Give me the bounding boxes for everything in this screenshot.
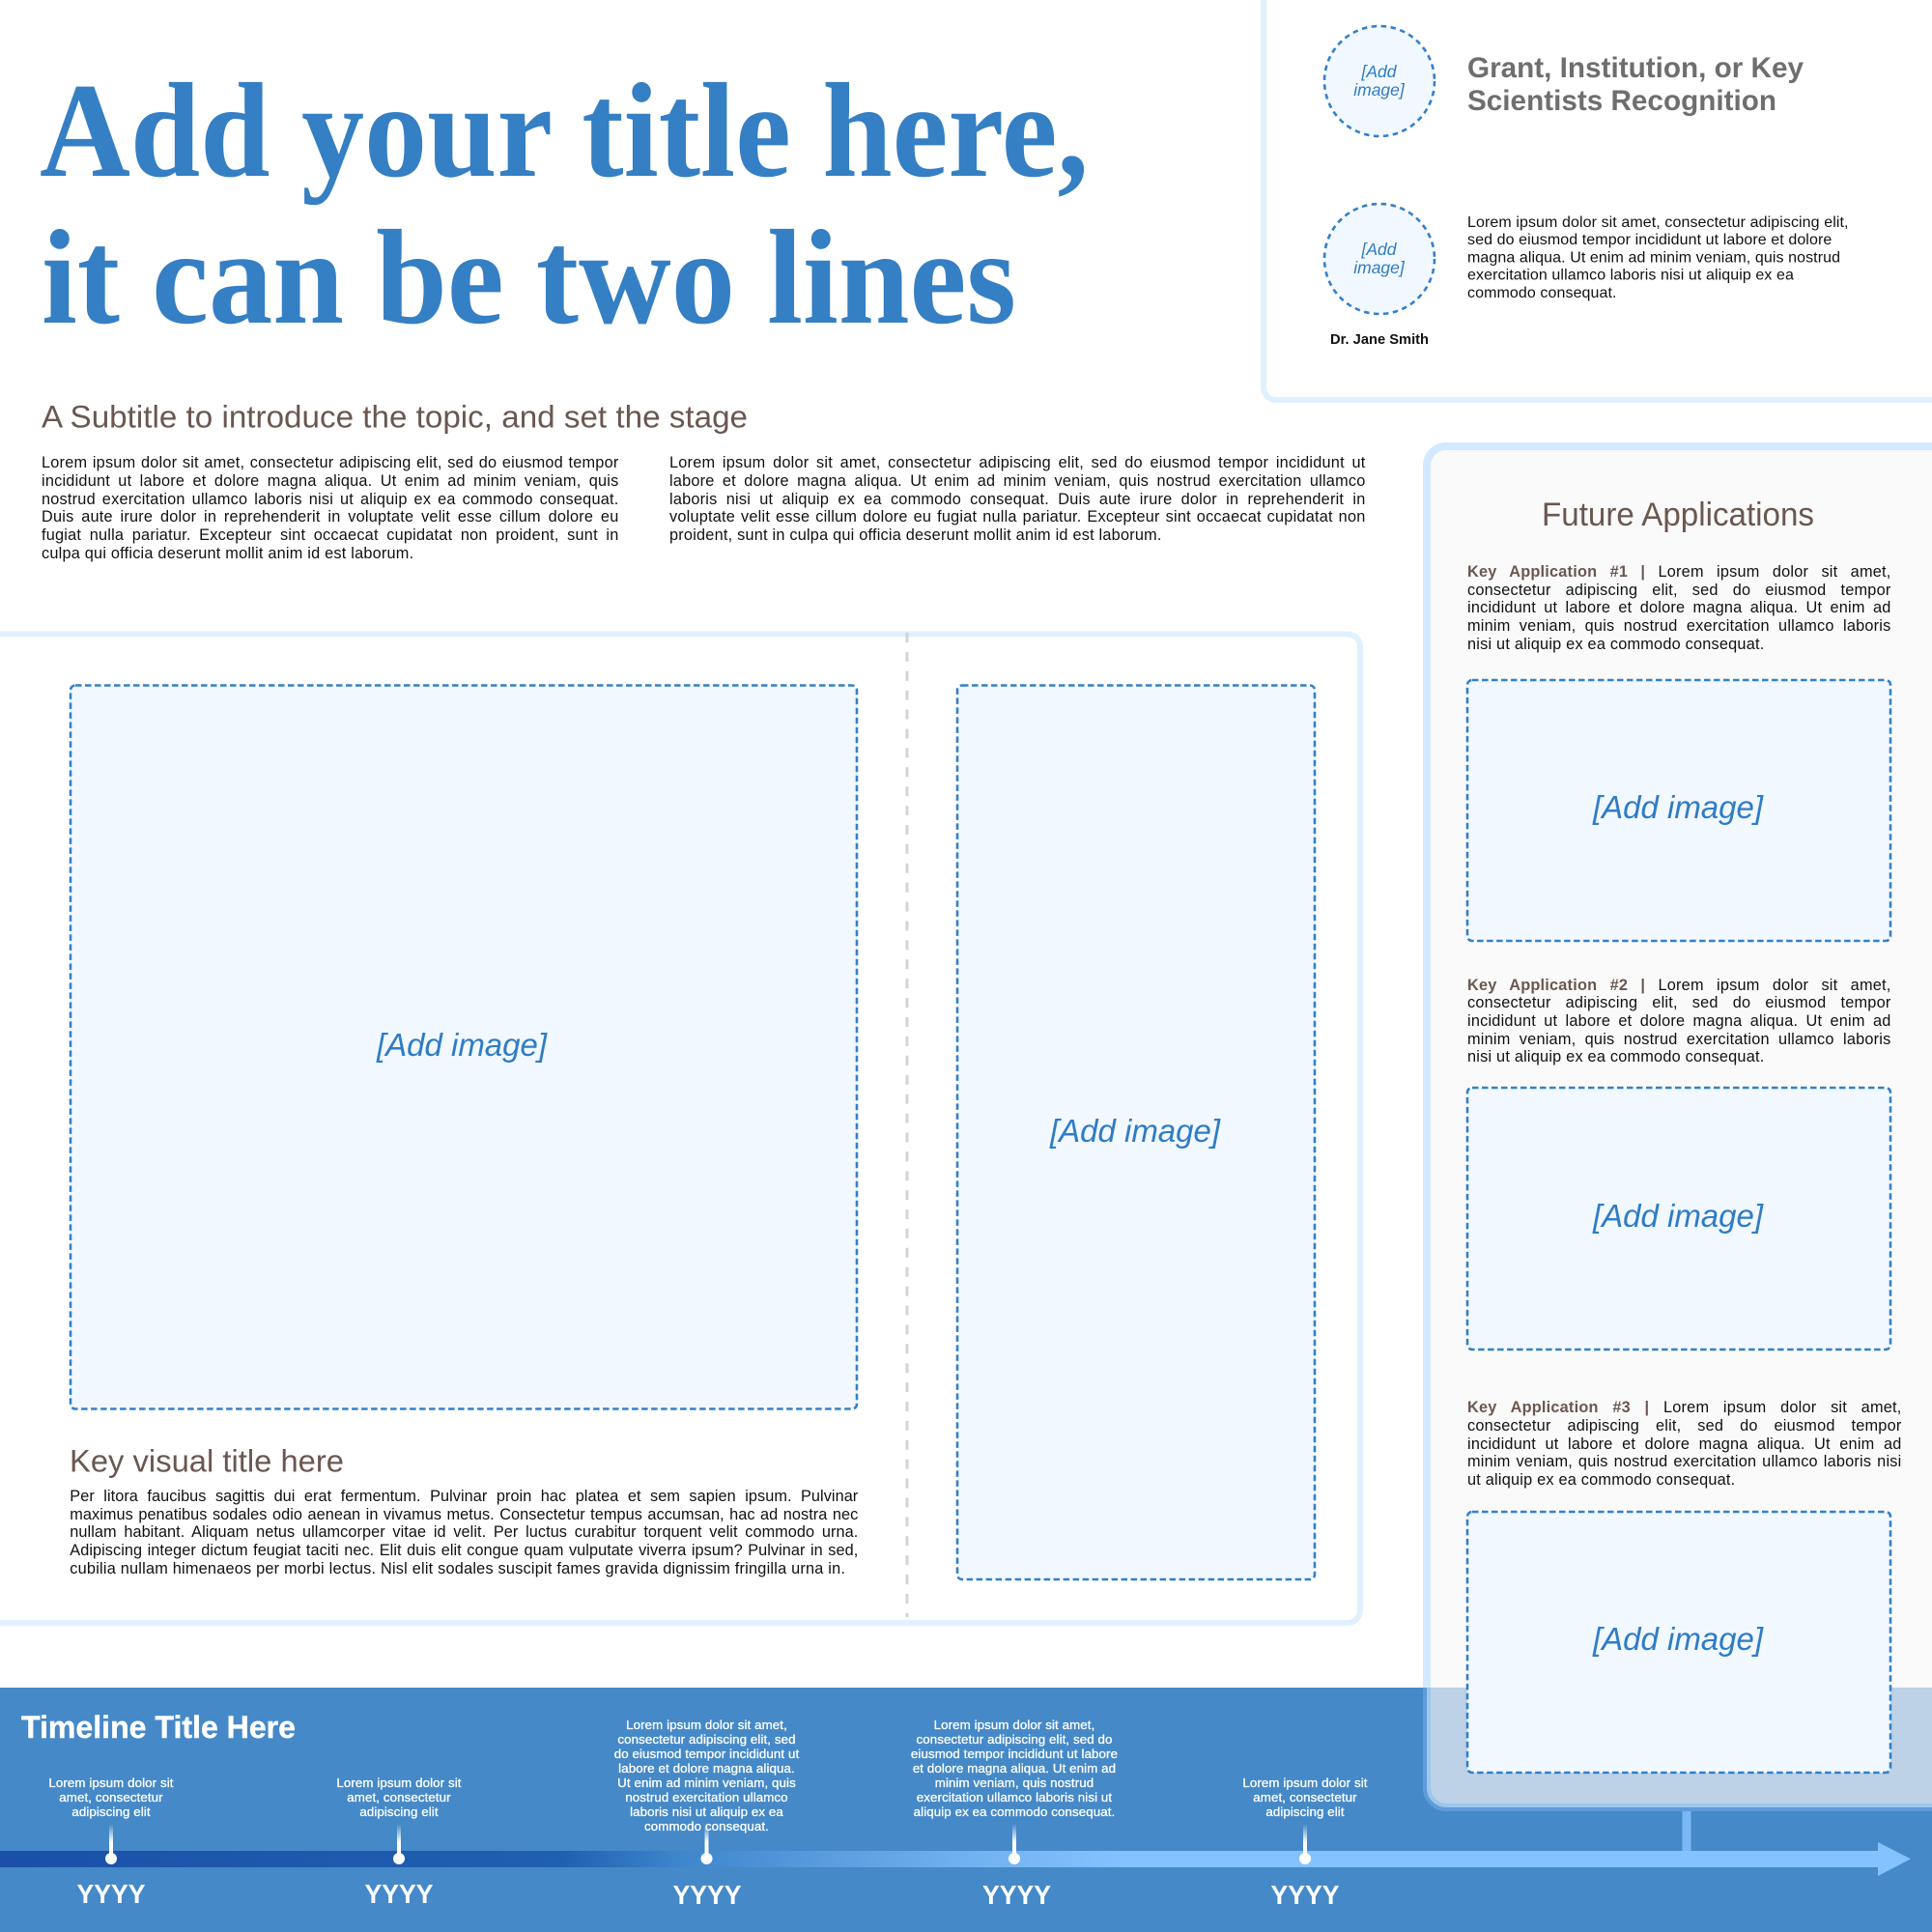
key visual text: nullam habitant. Aliquam netus ullamcorper vitae id velit. Per luctus curabitur torquent velit commodo urna.: [70, 1523, 858, 1541]
event 3: laboris nisi ut aliquip ex ea: [630, 1804, 783, 1819]
event 5: [1242, 1776, 1368, 1910]
intro text column 2: labore et dolore magna aliqua. Ut enim ad minim veniam, quis nostrud exercitation ullamco: [669, 472, 1366, 490]
application 2 text: consectetur adipiscing elit, sed do eiusmod tempor: [1467, 994, 1891, 1011]
key visual text: cubilia nullam himenaeos per morbi lectus. Nisl elit sodales suscipit fames gravida dignissim fringilla urna in.: [70, 1560, 845, 1577]
application 1 image placeholder: [Add image]: [1592, 789, 1764, 825]
event 2: amet, consectetur: [347, 1790, 451, 1804]
event 3: commodo consequat.: [644, 1819, 769, 1833]
application 2 text: Key Application #2 | Lorem ipsum dolor sit amet,: [1467, 977, 1891, 994]
recognition text: magna aliqua. Ut enim ad minim veniam, quis nostrud: [1467, 249, 1840, 267]
future applications heading: Future Applications: [1542, 497, 1814, 533]
event 2: adipiscing elit: [359, 1804, 439, 1819]
application 1 text: [1467, 563, 1891, 656]
recognition heading: Grant, Institution, or Key: [1467, 52, 1804, 84]
event 4: YYYY: [982, 1880, 1051, 1910]
key visual text: maximus penatibus sodales odio aenean in vivamus metus. Consectetur tempus accumsan, hac ad nostra nec: [70, 1506, 858, 1523]
icon: logo placeholder: [Add: [1360, 62, 1398, 81]
key visual text: Per litora faucibus sagittis dui erat fermentum. Pulvinar proin hac platea et sem sapien ipsum. Pulvinar: [70, 1488, 858, 1505]
event 1: YYYY: [77, 1879, 146, 1909]
application 3 text: consectetur adipiscing elit, sed do eiusmod tempor: [1467, 1417, 1901, 1435]
event 4: et dolore magna aliqua. Ut enim ad: [913, 1761, 1116, 1776]
intro text column 1: [42, 454, 618, 564]
icon: scientist portrait placeholder: [1324, 204, 1435, 314]
application 2 text: nisi ut aliquip ex ea commodo consequat.: [1467, 1048, 1764, 1065]
key visual title: Key visual title here: [70, 1443, 344, 1478]
event 5: Lorem ipsum dolor sit: [1242, 1776, 1368, 1790]
scientist name: Dr. Jane Smith: [1330, 332, 1429, 348]
icon: scientist portrait placeholder: image]: [1353, 258, 1406, 277]
event 3: Ut enim ad minim veniam, quis: [617, 1776, 796, 1790]
event 3: do eiusmod tempor incididunt ut: [614, 1747, 799, 1761]
event 4: consectetur adipiscing elit, sed do: [916, 1732, 1113, 1747]
recognition text: exercitation ullamco laboris nisi ut aliquip ex ea: [1467, 267, 1794, 284]
key visual text: Adipiscing integer dictum feugiat taciti nec. Elit duis elit congue quam vulputate viverra ipsum? Pulvinar in sed,: [70, 1542, 858, 1559]
event 3: nostrud exercitation ullamco: [625, 1790, 788, 1804]
intro text column 2: laboris nisi ut aliquip ex ea commodo consequat. Duis aute irure dolor in reprehenderit in: [669, 491, 1366, 508]
intro text column 2: voluptate velit esse cillum dolore eu fugiat nulla pariatur. Excepteur sint occaecat cupidatat non: [669, 508, 1366, 526]
event 4: Lorem ipsum dolor sit amet,: [934, 1718, 1094, 1732]
event 3: [614, 1718, 799, 1910]
recognition heading: Scientists Recognition: [1467, 85, 1776, 117]
event 4: eiusmod tempor incididunt ut labore: [911, 1747, 1118, 1761]
application 1 text: consectetur adipiscing elit, sed do eiusmod tempor: [1467, 582, 1891, 599]
event 3: consectetur adipiscing elit, sed: [617, 1732, 796, 1747]
application 1 image placeholder: [1467, 680, 1890, 941]
event 5: amet, consectetur: [1253, 1790, 1357, 1804]
application 3 text: ut aliquip ex ea commodo consequat.: [1467, 1471, 1735, 1489]
side image placeholder: [Add image]: [1049, 1113, 1221, 1149]
event 1: Lorem ipsum dolor sit: [48, 1776, 174, 1790]
recognition heading: [1467, 52, 1804, 117]
panel: recognition: [1264, 0, 1932, 400]
intro text column 1: culpa qui officia deserunt mollit anim id est laborum.: [42, 545, 413, 562]
timeline title: Timeline Title Here: [21, 1710, 296, 1745]
icon: scientist portrait placeholder: [Add: [1360, 240, 1398, 259]
title: [40, 56, 1089, 353]
title: it can be two lines: [42, 203, 1016, 353]
event 5: YYYY: [1271, 1880, 1340, 1910]
event 4: exercitation ullamco laboris nisi ut: [917, 1790, 1112, 1804]
title: Add your title here,: [40, 56, 1089, 206]
application 1 text: minim veniam, quis nostrud exercitation ullamco laboris: [1467, 617, 1891, 635]
application 2 text: [1467, 977, 1891, 1069]
application 2 text: incididunt ut labore et dolore magna aliqua. Ut enim ad: [1467, 1012, 1891, 1030]
key visual text: [70, 1488, 858, 1580]
intro text column 1: Lorem ipsum dolor sit amet, consectetur adipiscing elit, sed do eiusmod tempor: [42, 454, 618, 471]
application 2 image placeholder: [Add image]: [1592, 1198, 1764, 1234]
event 4: [911, 1718, 1118, 1910]
connector from panel to timeline: [1683, 1811, 1690, 1851]
event 1: adipiscing elit: [71, 1804, 151, 1819]
recognition text: [1467, 214, 1849, 301]
recognition text: Lorem ipsum dolor sit amet, consectetur adipiscing elit,: [1467, 214, 1849, 231]
intro text column 2: proident, sunt in culpa qui officia deserunt mollit anim id est laborum.: [669, 526, 1162, 544]
event 5: adipiscing elit: [1265, 1804, 1345, 1819]
intro text column 1: incididunt ut labore et dolore magna aliqua. Ut enim ad minim veniam, quis: [42, 472, 618, 490]
event 3: labore et dolore magna aliqua.: [618, 1761, 795, 1776]
application 3 text: [1467, 1399, 1901, 1492]
application 2 text: minim veniam, quis nostrud exercitation ullamco laboris: [1467, 1031, 1891, 1048]
intro text column 1: Duis aute irure dolor in reprehenderit in voluptate velit esse cillum dolore eu: [42, 508, 618, 526]
event 2: [336, 1776, 462, 1909]
event 3: Lorem ipsum dolor sit amet,: [626, 1718, 787, 1732]
event 2: Lorem ipsum dolor sit: [336, 1776, 462, 1790]
application 3 text: incididunt ut labore et dolore magna aliqua. Ut enim ad: [1467, 1435, 1901, 1453]
application 3 image placeholder: [1467, 1512, 1890, 1773]
event 1: [48, 1776, 174, 1909]
event 4: aliquip ex ea commodo consequat.: [914, 1804, 1115, 1819]
event 1: amet, consectetur: [59, 1790, 163, 1804]
panel: future applications: [1427, 446, 1932, 1807]
subtitle: A Subtitle to introduce the topic, and set the stage: [42, 400, 748, 435]
icon: logo placeholder: image]: [1353, 80, 1406, 99]
application 3 image placeholder: [Add image]: [1592, 1621, 1764, 1657]
application 1 text: nisi ut aliquip ex ea commodo consequat.: [1467, 636, 1764, 653]
application 1 text: Key Application #1 | Lorem ipsum dolor sit amet,: [1467, 563, 1891, 581]
timeline: [0, 1688, 1932, 1932]
intro text column 1: nostrud exercitation ullamco laboris nisi ut aliquip ex ea commodo consequat.: [42, 491, 618, 508]
intro text column 2: Lorem ipsum dolor sit amet, consectetur adipiscing elit, sed do eiusmod tempor incididunt ut: [669, 454, 1366, 471]
main image placeholder: [71, 686, 857, 1408]
intro text column 1: fugiat nulla pariatur. Excepteur sint occaecat cupidatat non proident, sunt in: [42, 526, 618, 544]
recognition text: commodo consequat.: [1467, 285, 1617, 301]
main image placeholder: [Add image]: [376, 1027, 548, 1063]
event 3: YYYY: [672, 1880, 742, 1910]
side image placeholder: [957, 686, 1315, 1579]
panel: key visual: [0, 633, 1360, 1623]
recognition text: sed do eiusmod tempor incididunt ut labore et dolore: [1467, 232, 1832, 248]
application 3 text: Key Application #3 | Lorem ipsum dolor sit amet,: [1467, 1399, 1901, 1416]
event 4: minim veniam, quis nostrud: [935, 1776, 1094, 1790]
intro text column 2: [669, 454, 1366, 547]
event 2: YYYY: [365, 1879, 434, 1909]
icon: logo placeholder: [1324, 26, 1435, 136]
application 3 text: minim veniam, quis nostrud exercitation ullamco laboris nisi: [1467, 1453, 1901, 1470]
application 2 image placeholder: [1467, 1088, 1890, 1350]
arrow: [0, 1842, 1911, 1876]
application 1 text: incididunt ut labore et dolore magna aliqua. Ut enim ad: [1467, 599, 1891, 616]
